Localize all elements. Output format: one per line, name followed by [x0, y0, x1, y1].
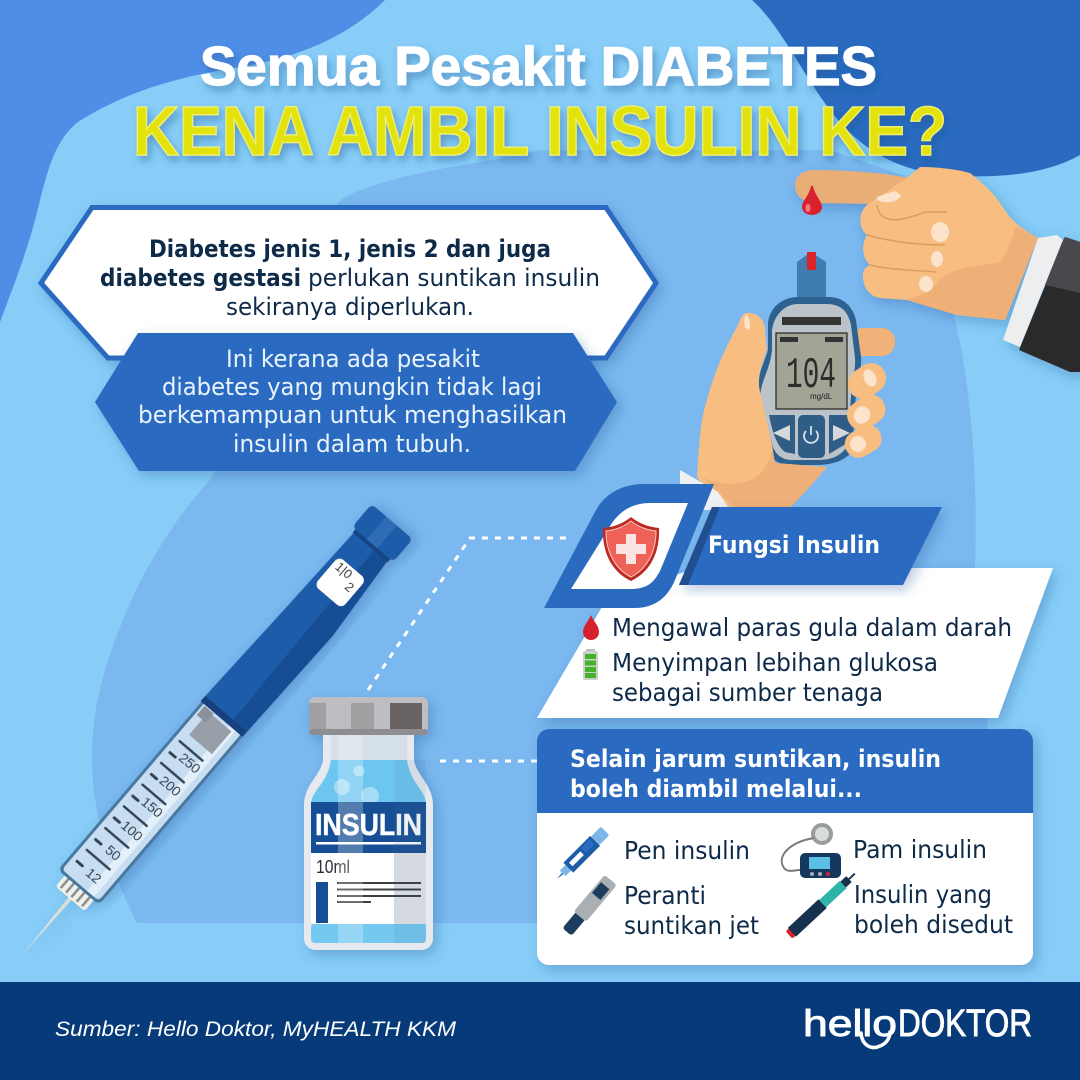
text: options: Insulin yang: [854, 880, 992, 909]
heading: Fungsi Insulin: [679, 507, 942, 585]
icon: red drop: [583, 615, 599, 640]
pen cap: [352, 504, 413, 562]
logo: DOKTOR: [898, 1003, 1032, 1045]
holding hand and thumb: [697, 313, 827, 508]
bubbles: [334, 766, 379, 805]
illustration: insulin vial: [304, 697, 433, 950]
fist: [860, 167, 1038, 320]
meter body: [753, 297, 861, 465]
top finger behind meter: [850, 328, 895, 356]
vial cap: [309, 697, 428, 735]
icon: insulin pen: [552, 826, 610, 884]
title: [133, 35, 947, 170]
text: options: boleh disedut: [854, 910, 1013, 939]
text: reason: [138, 345, 567, 458]
meter screen: [776, 333, 847, 409]
scale numbers: 12: [83, 864, 105, 887]
needle: [20, 896, 73, 956]
shirt cuff: [1003, 235, 1063, 347]
text: reason: berkemampuan untuk menghasilkan: [138, 401, 567, 429]
shirt cuff: [680, 470, 730, 510]
text: diabetes types: diabetes gestasi: [100, 264, 301, 292]
title: Semua Pesakit DIABETES: [200, 35, 877, 97]
icon: inhaled insulin device: [785, 869, 859, 939]
text: functions: [612, 613, 1012, 707]
panel: insulin function list: [537, 568, 1053, 718]
panel header: Selain jarum suntikan, insulin: [570, 745, 941, 773]
text: diabetes types: [100, 235, 600, 321]
suit sleeve: [1019, 237, 1080, 372]
vial label: [311, 802, 426, 924]
text: options: Peranti: [624, 881, 706, 910]
pen body: [201, 525, 395, 739]
dose window: 2: [342, 579, 357, 595]
text: diabetes types: sekiranya diperlukan.: [226, 293, 474, 321]
text: reason: Ini kerana ada pesakit: [226, 345, 480, 373]
scale numbers: [80, 749, 204, 889]
dose window: 1|0: [332, 559, 356, 582]
text: functions: Menyimpan lebihan glukosa: [612, 648, 938, 677]
text: options: suntikan jet: [624, 911, 759, 940]
text: functions: sebagai sumber tenaga: [612, 678, 883, 707]
icon badge: shield: [544, 484, 714, 608]
panel: other ways to take insulin: [537, 729, 1033, 965]
logo: [803, 1003, 1032, 1047]
text: options: Pen insulin: [624, 836, 750, 865]
meter screen: 104: [786, 351, 836, 401]
illustration: insulin pen: [0, 503, 414, 974]
scale numbers: 50: [102, 842, 125, 864]
scale ticks: [77, 741, 202, 881]
scale numbers: 150: [138, 793, 166, 821]
text: diabetes types: perlukan suntikan insulin: [308, 264, 600, 292]
logo: hello: [803, 1003, 897, 1044]
test strip: [797, 252, 826, 303]
scale numbers: 200: [156, 772, 185, 800]
glass barrel: [58, 698, 246, 905]
icon: battery: [583, 649, 598, 680]
connector: dotted lines: [368, 538, 572, 761]
vial glass: [304, 735, 433, 950]
illustration: hand pricking finger: [795, 167, 1080, 372]
text: diabetes types: Diabetes jenis 1, jenis 2 dan juga: [149, 235, 551, 263]
text: options: [624, 835, 1013, 940]
knuckle lines: [867, 205, 947, 272]
icon: blood drop: [802, 186, 822, 215]
text: reason: diabetes yang mungkin tidak lagi: [162, 373, 542, 401]
heading: Fungsi Insulin: Fungsi Insulin: [708, 531, 880, 559]
scale numbers: 100: [118, 817, 146, 845]
vial label: INSULIN: [315, 807, 422, 842]
glass highlights: [338, 735, 363, 943]
meter screen: mg/dL: [810, 392, 833, 401]
meter buttons: [769, 415, 855, 458]
shield: [603, 517, 659, 581]
title: KENA AMBIL INSULIN KE?: [133, 92, 947, 170]
panel header: [537, 729, 1033, 813]
panel: reason: [95, 333, 617, 471]
vial label: 10ml: [316, 857, 350, 877]
footer bar: [0, 982, 1080, 1080]
text: reason: insulin dalam tubuh.: [233, 430, 471, 458]
text: options: Pam insulin: [853, 835, 987, 864]
liquid: [311, 760, 426, 925]
scale numbers: 250: [176, 749, 204, 777]
needle hub: [56, 874, 95, 911]
fingers: [842, 357, 892, 405]
text: functions: Mengawal paras gula dalam darah: [612, 613, 1012, 642]
index finger: [795, 170, 910, 204]
icon: insulin pump: [782, 825, 841, 878]
panel: diabetes types: [41, 208, 656, 358]
dose window: [314, 556, 366, 609]
source text: Sumber: Hello Doktor, MyHEALTH KKM: [55, 1018, 457, 1041]
panel header: boleh diambil melalui...: [570, 775, 862, 803]
nails: [877, 191, 901, 202]
illustration: glucose meter in hand: [680, 252, 895, 510]
icon: jet injector: [561, 875, 617, 937]
